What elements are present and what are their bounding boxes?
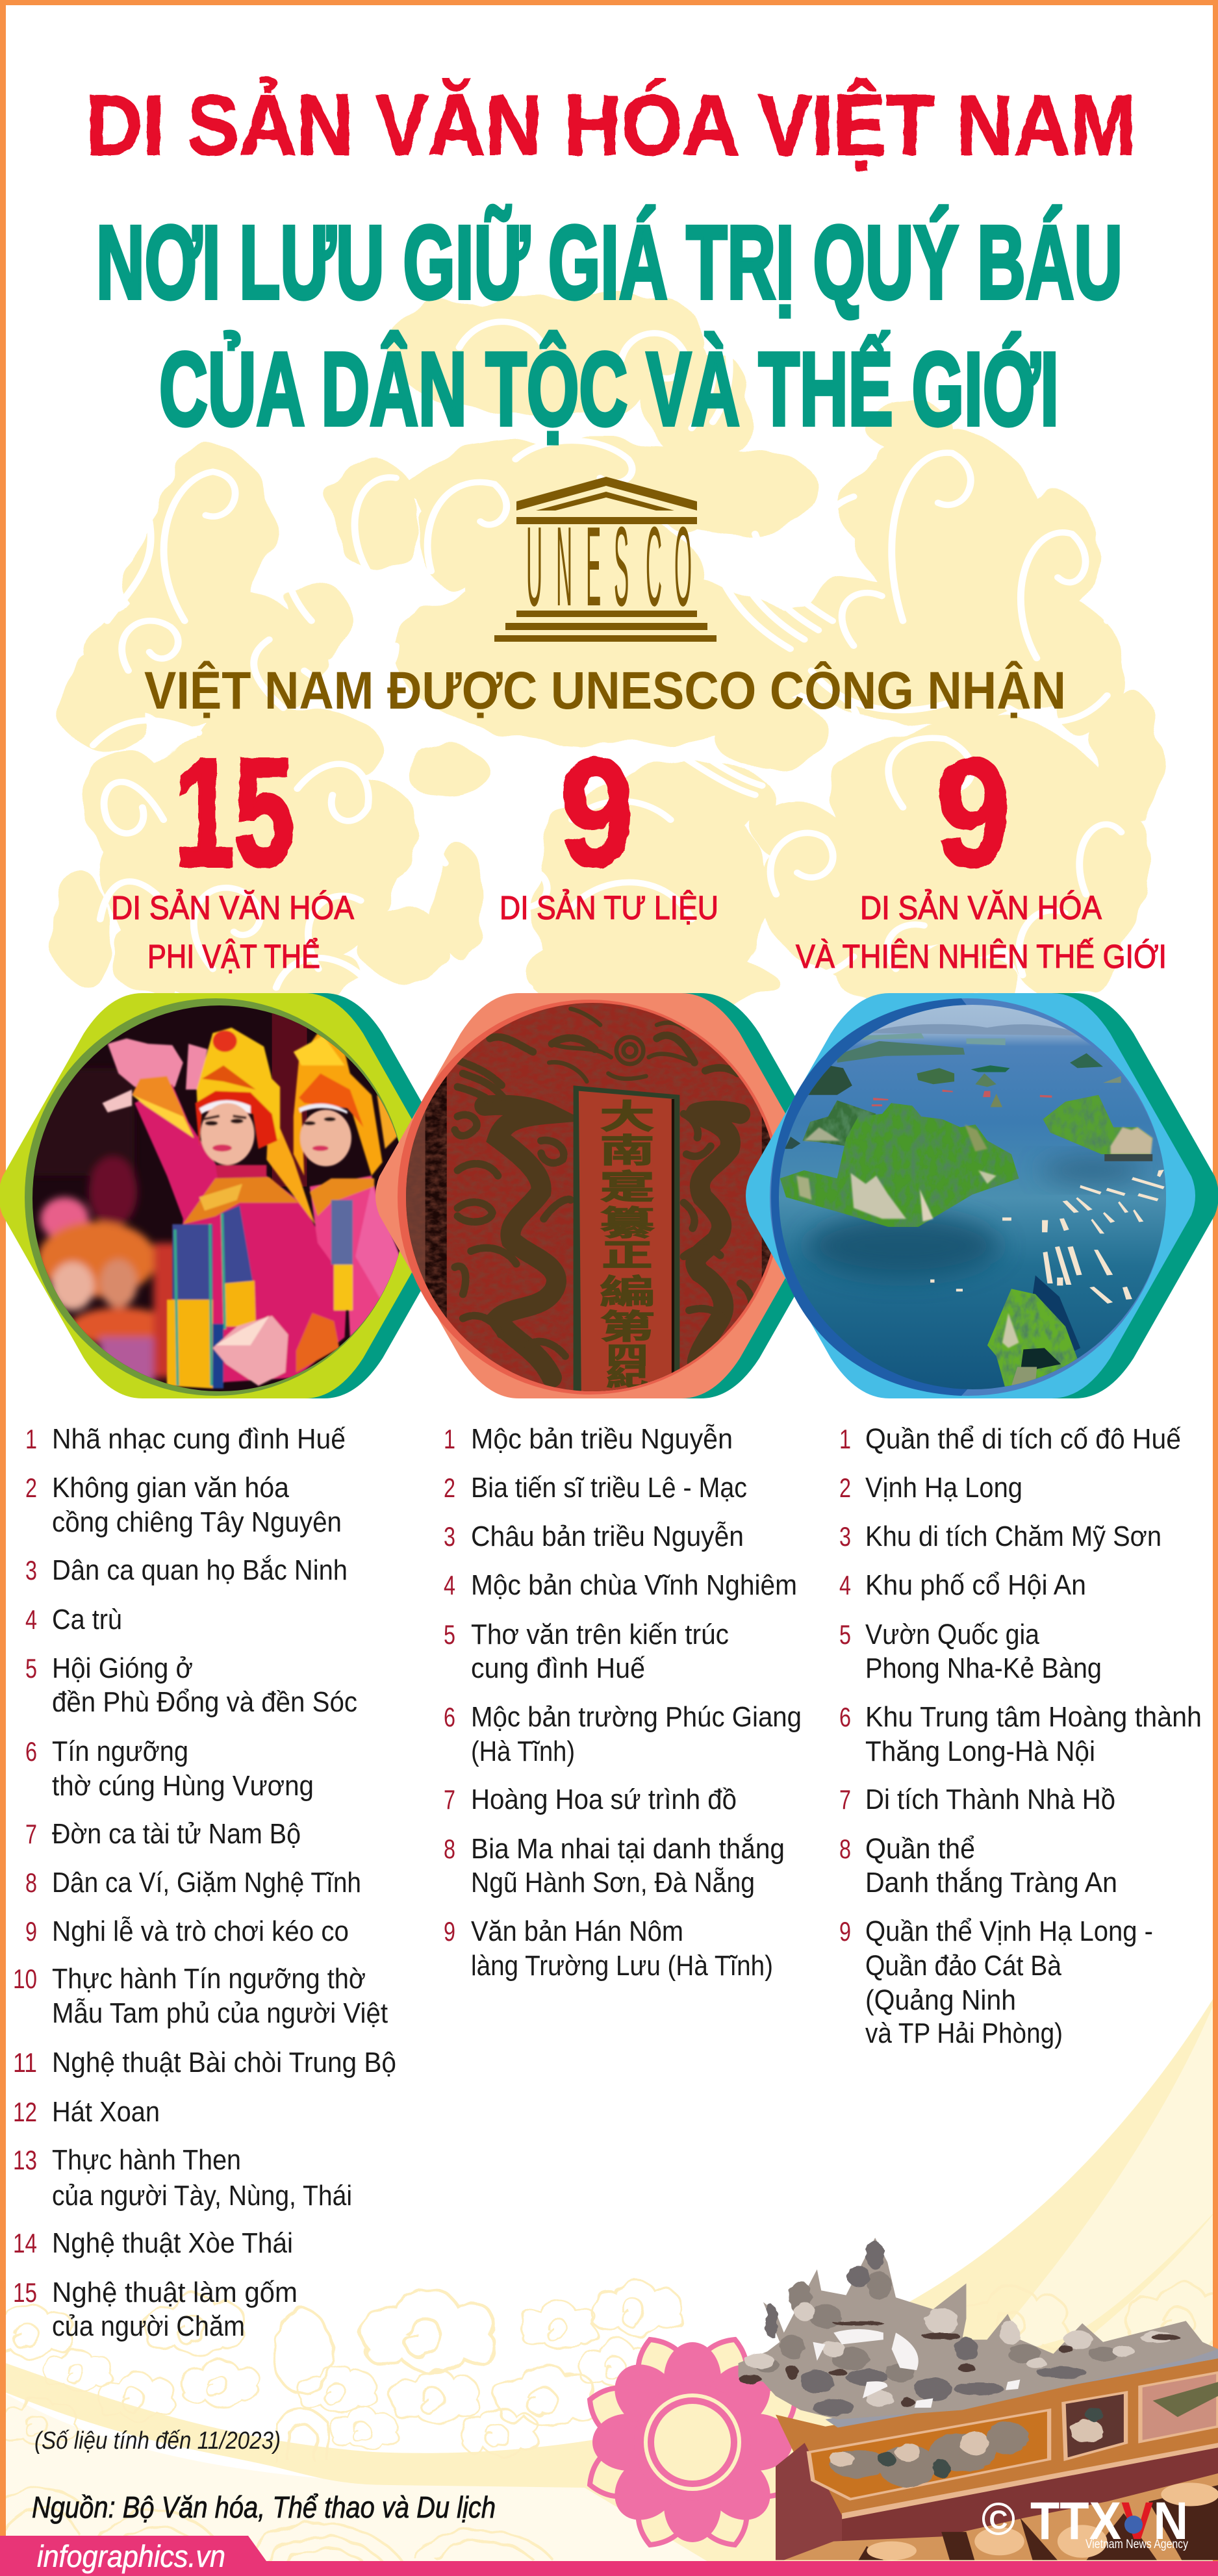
item 6: thờ cúng Hùng Vương <box>52 1770 314 1802</box>
item 6 <box>839 1701 1202 1767</box>
item 2: 2 <box>25 1472 37 1503</box>
item 7: Hoàng Hoa sứ trình đồ <box>471 1784 737 1815</box>
item 11: Nghệ thuật Bài chòi Trung Bộ <box>52 2047 396 2078</box>
stat: 9 world cultural and natural heritage: 9 <box>936 727 1010 898</box>
item 9: 9 <box>444 1916 455 1947</box>
heading: Viet Nam duoc UNESCO cong nhan: VIỆT NAM ĐƯỢC UNESCO CÔNG NHẬN <box>144 661 1066 720</box>
temple roof ornament <box>739 2238 1218 2560</box>
stat: 15 intangible heritage: PHI VẬT THỂ <box>147 937 320 975</box>
item 10: 10 <box>13 1964 37 1994</box>
item 7: Đờn ca tài tử Nam Bộ <box>52 1818 301 1850</box>
item 6: Mộc bản trường Phúc Giang <box>471 1701 802 1733</box>
item 5: 5 <box>444 1619 455 1650</box>
item 12: 12 <box>13 2097 37 2127</box>
item 10 <box>13 1963 388 2029</box>
item 1: Quần thể di tích cố đô Huế <box>865 1423 1181 1455</box>
item 13: 13 <box>13 2145 37 2175</box>
item 3: 3 <box>839 1521 851 1552</box>
photo panel: woodblock: 正 <box>602 1238 653 1272</box>
item 8: Danh thắng Tràng An <box>865 1867 1117 1899</box>
item 2: cồng chiêng Tây Nguyên <box>52 1506 342 1538</box>
stat: 15 intangible heritage <box>111 727 354 975</box>
item 10: Mẫu Tam phủ của người Việt <box>52 1997 388 2029</box>
list: world heritage <box>839 1423 1202 2049</box>
item 4: 4 <box>839 1570 851 1600</box>
photo panel: woodblock: 第 <box>600 1308 655 1346</box>
item 3: Châu bản triều Nguyễn <box>471 1521 744 1552</box>
item 4: Ca trù <box>52 1604 122 1635</box>
photo panel: woodblock: 寔 <box>600 1168 655 1206</box>
item 3: Khu di tích Chăm Mỹ Sơn <box>865 1521 1161 1552</box>
item 4: Khu phố cổ Hội An <box>865 1569 1086 1601</box>
item 6: (Hà Tĩnh) <box>471 1736 575 1767</box>
item 13: Thực hành Then <box>52 2144 241 2176</box>
item 9: 9 <box>839 1916 851 1947</box>
item 12: Hát Xoan <box>52 2096 160 2128</box>
stat: 15 intangible heritage: DI SẢN VĂN HÓA <box>111 889 354 926</box>
item 9 <box>839 1915 1153 2049</box>
item 6: Tín ngưỡng <box>52 1736 188 1767</box>
stat: 9 world cultural and natural heritage <box>796 727 1167 975</box>
footer bar <box>0 2536 1218 2576</box>
item 5: 5 <box>839 1619 851 1650</box>
item 5 <box>25 1652 357 1718</box>
item 2: Vịnh Hạ Long <box>865 1472 1022 1504</box>
TTXVN logo: TTXVN <box>1030 2492 1188 2551</box>
item 6: 6 <box>839 1702 851 1732</box>
item 6: Thăng Long-Hà Nội <box>865 1736 1095 1767</box>
stat: 9 documentary heritage: DI SẢN TƯ LIỆU <box>500 889 718 926</box>
item 1: Nhã nhạc cung đình Huế <box>52 1423 346 1455</box>
item 11: 11 <box>13 2047 37 2078</box>
photo panel: woodblock: 編 <box>600 1273 655 1311</box>
item 5: 5 <box>25 1653 37 1684</box>
item 5: cung đình Huế <box>471 1652 645 1684</box>
item 4: Mộc bản chùa Vĩnh Nghiêm <box>471 1569 797 1601</box>
photo panel: woodblock: 纂 <box>600 1204 655 1242</box>
photo panel: woodblock: 四 <box>606 1341 648 1370</box>
item 7: 7 <box>25 1819 37 1849</box>
item 9: Quần đảo Cát Bà <box>865 1950 1061 1982</box>
item 9: làng Trường Lưu (Hà Tĩnh) <box>471 1950 773 1982</box>
item 1: 1 <box>839 1424 851 1454</box>
item 9 <box>444 1915 773 1982</box>
item 8: Ngũ Hành Sơn, Đà Nẵng <box>471 1867 755 1899</box>
item 1: 1 <box>444 1424 455 1454</box>
item 14: 14 <box>13 2228 37 2258</box>
item 9: và TP Hải Phòng) <box>865 2017 1063 2049</box>
item 6 <box>25 1736 314 1802</box>
decorative dragon cloud medallion <box>51 292 1163 1013</box>
item 3: Dân ca quan họ Bắc Ninh <box>52 1554 348 1586</box>
item 5: Thơ văn trên kiến trúc <box>471 1619 729 1650</box>
item 9: Quần thể Vịnh Hạ Long - <box>865 1915 1153 1947</box>
item 5 <box>839 1619 1102 1684</box>
photo panel: Ha Long Bay <box>746 987 1218 1409</box>
item 4 <box>25 1604 122 1635</box>
item 5: Phong Nha-Kẻ Bàng <box>865 1652 1102 1684</box>
title: di san van hoa: DI SẢN VĂN HÓA VIỆT NAM <box>86 77 1136 173</box>
item 8 <box>839 1833 1117 1899</box>
item 9: 9 <box>25 1916 37 1947</box>
item 13 <box>13 2144 352 2212</box>
list: documentary heritage <box>444 1423 802 1982</box>
item 4: 4 <box>444 1570 455 1600</box>
item 2 <box>25 1472 342 1538</box>
item 8: 8 <box>444 1834 455 1864</box>
item 8: 8 <box>25 1867 37 1898</box>
photo panel: woodblock: 紀 <box>606 1363 648 1391</box>
item 7: Di tích Thành Nhà Hồ <box>865 1784 1115 1815</box>
item 5: Vườn Quốc gia <box>865 1619 1039 1650</box>
item 6: Khu Trung tâm Hoàng thành <box>865 1701 1202 1733</box>
icon: UNESCO temple logo <box>494 477 717 642</box>
item 10: Thực hành Tín ngưỡng thờ <box>52 1963 366 1995</box>
TTXVN logo: Vietnam News Agency <box>1085 2538 1188 2551</box>
item 1: 1 <box>25 1424 37 1454</box>
photo panel: woodblock <box>375 993 795 1398</box>
item 3: 3 <box>25 1555 37 1585</box>
item 6: 6 <box>444 1702 455 1732</box>
stat: 9 documentary heritage <box>500 727 718 926</box>
item 2: 2 <box>839 1472 851 1503</box>
photo panel: woodblock: 大 <box>600 1098 655 1136</box>
item 15: của người Chăm <box>52 2310 245 2342</box>
bottom cream crescent background <box>0 1991 1218 2566</box>
item 8: Quần thể <box>865 1833 975 1865</box>
item 5: đền Phù Đổng và đền Sóc <box>52 1686 357 1718</box>
item 6 <box>444 1701 802 1767</box>
item 15: 15 <box>13 2277 37 2308</box>
bottom line-art cloud pattern <box>0 2280 1218 2566</box>
item 6: 6 <box>25 1736 37 1767</box>
photo panel: woodblock: 南 <box>600 1132 655 1169</box>
item 2: Không gian văn hóa <box>52 1472 289 1504</box>
icon: pink lotus flower <box>581 2330 804 2554</box>
website label: infographics.vn <box>37 2539 225 2573</box>
item 8: Dân ca Ví, Giặm Nghệ Tĩnh <box>52 1867 361 1899</box>
item 8: Bia Ma nhai tại danh thắng <box>471 1833 785 1865</box>
item 2: 2 <box>444 1472 455 1503</box>
item 14: Nghệ thuật Xòe Thái <box>52 2227 293 2259</box>
item 3: 3 <box>444 1521 455 1552</box>
item 7: 7 <box>839 1784 851 1815</box>
item 12 <box>13 2096 160 2128</box>
item 1: Mộc bản triều Nguyễn <box>471 1423 733 1455</box>
item 2: Bia tiến sĩ triều Lê - Mạc <box>471 1472 747 1504</box>
icon: UNESCO temple logo: UNESCO <box>526 503 692 629</box>
stat: 9 world cultural and natural heritage: VÀ THIÊN NHIÊN THẾ GIỚI <box>796 937 1167 975</box>
item 5 <box>444 1619 729 1684</box>
item 7: 7 <box>444 1784 455 1815</box>
item 15 <box>13 2277 298 2342</box>
source: Nguồn: Bộ Văn hóa, Thể thao và Du lịch <box>32 2490 496 2524</box>
item 9: Văn bản Hán Nôm <box>471 1915 683 1947</box>
item 8 <box>444 1833 785 1899</box>
note: data as of: (Số liệu tính đến 11/2023) <box>34 2427 281 2455</box>
item 5: Hội Gióng ở <box>52 1652 193 1684</box>
item 13: của người Tày, Nùng, Thái <box>52 2180 352 2212</box>
item 8: 8 <box>839 1834 851 1864</box>
stat: 15 intangible heritage: 15 <box>175 727 294 898</box>
list: intangible heritage <box>13 1423 396 2342</box>
item 9: Nghi lễ và trò chơi kéo co <box>52 1915 349 1947</box>
stat: 9 documentary heritage: 9 <box>561 727 633 898</box>
item 9: (Quảng Ninh <box>865 1984 1016 2016</box>
stat: 9 world cultural and natural heritage: DI SẢN VĂN HÓA <box>860 889 1102 926</box>
photo panel: dancers <box>0 993 422 1398</box>
item 4: 4 <box>25 1604 37 1635</box>
item 15: Nghệ thuật làm gốm <box>52 2277 298 2308</box>
TTXVN logo: C <box>989 2506 1008 2534</box>
